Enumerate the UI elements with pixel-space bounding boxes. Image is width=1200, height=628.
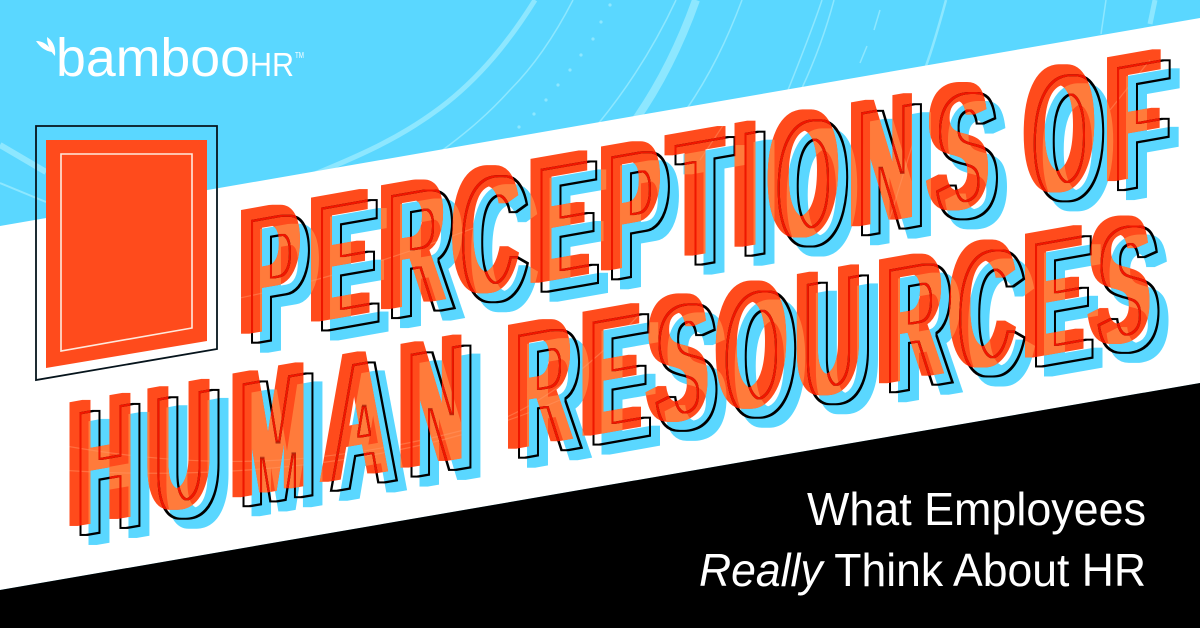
subtitle line 1: What Employees bbox=[807, 483, 1146, 535]
title orange layer: HUMAN RESOURCES bbox=[68, 175, 1149, 566]
logo wordmark: HR bbox=[250, 46, 294, 83]
title: Perceptions of Human Resources bbox=[70, 49, 1180, 545]
title red outline over orange: PERCEPTIONS OF bbox=[249, 21, 1170, 384]
title blue shadow layer: HUMAN RESOURCES bbox=[86, 194, 1168, 585]
title black outline layer: HUMAN RESOURCES bbox=[78, 185, 1159, 576]
inner white line bbox=[61, 154, 192, 351]
title orange layer: PERCEPTIONS OF bbox=[239, 11, 1160, 374]
title overlap tint bbox=[88, 76, 1150, 524]
title blue shadow layer: PERCEPTIONS OF bbox=[258, 30, 1179, 393]
title black outline layer: PERCEPTIONS OF bbox=[249, 21, 1170, 384]
title red outline over orange: HUMAN RESOURCES bbox=[78, 185, 1159, 576]
outer black line bbox=[36, 126, 217, 380]
title red outline over orange bbox=[80, 60, 1161, 526]
icon: bamboo leaves bbox=[36, 37, 55, 56]
black diagonal footer bbox=[0, 383, 1200, 628]
panel: orange frame bbox=[36, 126, 217, 380]
logo: BambooHR bbox=[36, 28, 304, 88]
subtitle line 2: Really Think About HR bbox=[699, 544, 1146, 596]
logo wordmark: TM bbox=[295, 51, 304, 60]
orange panel bbox=[46, 140, 207, 368]
logo wordmark: bamboo bbox=[56, 28, 250, 88]
title texture streaks bbox=[60, 60, 1150, 473]
background arcs bbox=[0, 0, 1155, 202]
subtitle bbox=[699, 483, 1146, 596]
